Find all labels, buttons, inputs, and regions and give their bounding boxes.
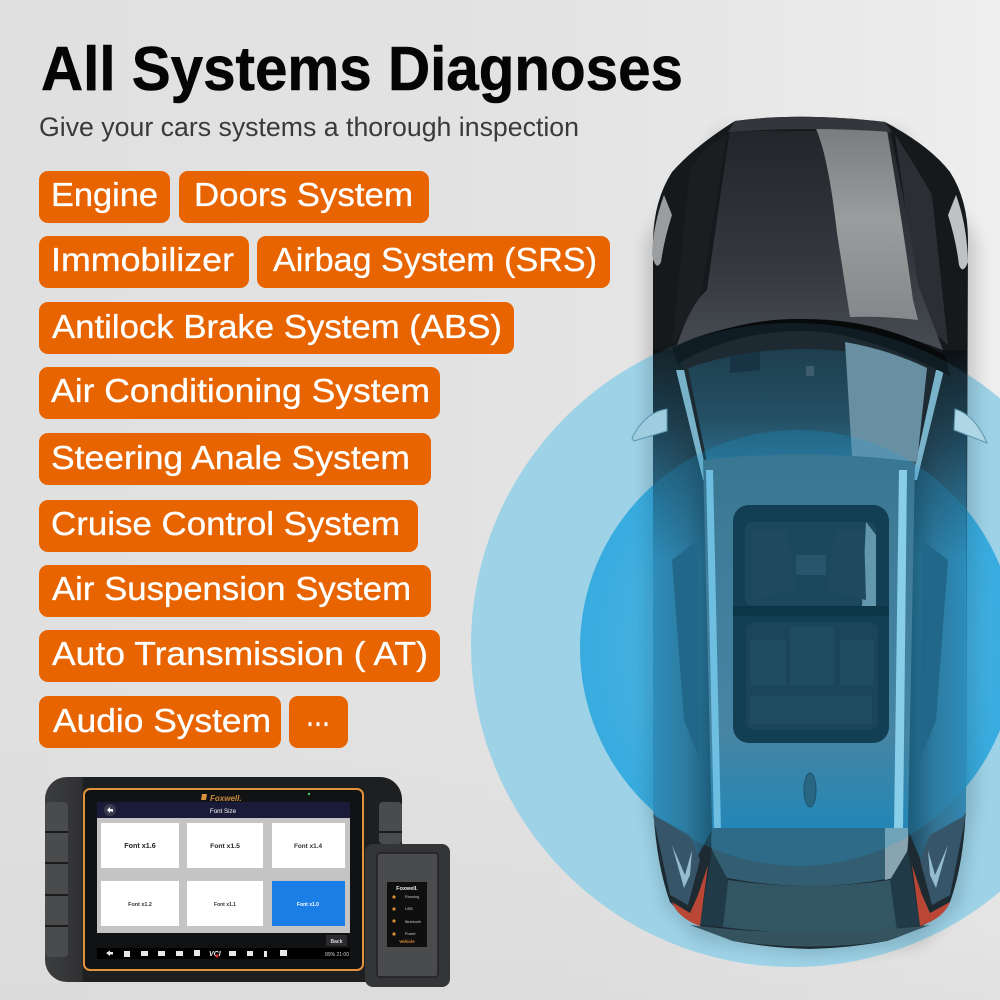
hood highlight bbox=[812, 120, 918, 320]
tile x1.5 bbox=[187, 823, 263, 868]
tag: Airbag System (SRS): Airbag System (SRS) bbox=[273, 241, 597, 278]
bottom toolbar: 89% 21:00 bbox=[325, 952, 349, 958]
tail light right bbox=[912, 865, 950, 926]
bezel bbox=[84, 789, 363, 970]
tile x1.2 bbox=[101, 881, 179, 926]
hood bbox=[677, 131, 943, 350]
adapter indicators: Running bbox=[405, 895, 419, 899]
tile x1.5: Font x1.5 bbox=[210, 843, 240, 850]
rear seats bbox=[750, 626, 874, 724]
tail light left bbox=[672, 865, 708, 926]
tag: Air Suspension System bbox=[39, 565, 431, 617]
tablet body bbox=[45, 777, 402, 982]
right quarter chrome bbox=[928, 845, 948, 888]
grip ribs bbox=[45, 832, 402, 926]
device: scan tablet bbox=[45, 777, 402, 982]
headlight left bbox=[652, 195, 672, 266]
tag: Airbag System (SRS) bbox=[257, 236, 610, 288]
status light bbox=[308, 793, 310, 795]
front sunroof glass bbox=[745, 522, 876, 606]
car body bbox=[653, 117, 968, 949]
back button: Back bbox=[331, 939, 343, 945]
tile x1.0 bbox=[272, 881, 345, 926]
tag: Doors System bbox=[179, 171, 429, 223]
adapter inner panel bbox=[377, 853, 438, 977]
tag: more bbox=[289, 696, 348, 748]
adapter vehicle label: Vehicle bbox=[399, 939, 415, 944]
title: All Systems Diagnoses bbox=[41, 35, 683, 104]
screen header bbox=[97, 802, 350, 818]
tile x1.6 bbox=[101, 823, 179, 868]
inner circle tint bbox=[580, 430, 1000, 866]
sunroof divider bbox=[733, 606, 889, 616]
left fender bbox=[672, 135, 727, 345]
sunroof bbox=[733, 505, 889, 743]
tag: Audio System: Audio System bbox=[53, 702, 271, 739]
rear glass bbox=[723, 880, 897, 933]
car shadow bbox=[646, 130, 976, 955]
screen grid bbox=[97, 818, 350, 933]
tag: Engine: Engine bbox=[51, 176, 158, 213]
outer scan circle bbox=[471, 323, 1000, 967]
glass reflection bbox=[862, 522, 876, 606]
tile x1.1: Font x1.1 bbox=[214, 902, 236, 908]
right lower quarter bbox=[920, 815, 966, 905]
roof right rail bbox=[894, 470, 907, 830]
front seats bbox=[752, 530, 866, 600]
outer circle tint bbox=[471, 323, 1000, 967]
bottom toolbar: VCI bbox=[209, 951, 222, 958]
hood top edge bbox=[728, 117, 892, 132]
left rear pillar bbox=[700, 850, 728, 927]
tag: Doors System: Doors System bbox=[194, 176, 413, 213]
roof bbox=[703, 454, 915, 830]
rear sunroof glass bbox=[746, 622, 878, 730]
tile x1.4 bbox=[272, 823, 345, 868]
tag: Air Suspension System: Air Suspension System bbox=[52, 570, 411, 607]
screen title: Font Size bbox=[210, 808, 237, 815]
right window dark bbox=[920, 540, 948, 760]
left A pillar strip bbox=[676, 370, 708, 480]
left door shading bbox=[653, 350, 708, 560]
tag: Steering Anale System: Steering Anale System bbox=[51, 439, 410, 476]
adapter body bbox=[365, 844, 450, 987]
spoiler bbox=[711, 828, 908, 886]
adapter indicator icons bbox=[392, 895, 396, 936]
tag: Auto Transmission ( AT) bbox=[39, 630, 440, 682]
rear bumper bbox=[690, 925, 930, 946]
left grip bbox=[45, 802, 68, 957]
windshield highlight bbox=[845, 342, 927, 462]
left quarter chrome bbox=[672, 845, 692, 888]
tag: Immobilizer: Immobilizer bbox=[51, 241, 234, 278]
tag: Antilock Brake System (ABS): Antilock Brake System (ABS) bbox=[52, 308, 502, 345]
tag: Air Conditioning System bbox=[39, 367, 440, 419]
left lower quarter bbox=[653, 815, 700, 905]
windshield bbox=[688, 349, 927, 462]
left door panel bbox=[653, 350, 712, 880]
tile x1.1 bbox=[187, 881, 263, 926]
tile x1.4: Font x1.4 bbox=[294, 843, 322, 850]
adapter indicators: Bluetooth bbox=[405, 920, 421, 924]
right rear pillar bbox=[890, 850, 920, 930]
tag: Engine bbox=[39, 171, 170, 223]
right door panel bbox=[908, 350, 967, 880]
inner scan circle bbox=[580, 430, 1000, 866]
rearview mirror bbox=[806, 366, 814, 376]
spoiler highlight bbox=[885, 828, 908, 880]
tile x1.2: Font x1.2 bbox=[128, 902, 152, 908]
back button bbox=[326, 935, 347, 946]
tile x1.6: Font x1.6 bbox=[124, 841, 156, 850]
mirror left bbox=[632, 409, 667, 441]
adapter label bbox=[387, 882, 427, 947]
shark fin antenna bbox=[804, 773, 816, 807]
tag: Audio System bbox=[39, 696, 281, 748]
right fender bbox=[895, 135, 948, 345]
subtitle: Give your cars systems a thorough inspection bbox=[39, 112, 579, 142]
tag: Immobilizer bbox=[39, 236, 249, 288]
tag: Auto Transmission ( AT): Auto Transmission ( AT) bbox=[52, 635, 428, 672]
mirror right bbox=[954, 409, 987, 443]
adapter indicators bbox=[405, 895, 421, 936]
brand logo: Foxwell. bbox=[210, 794, 242, 803]
dash camera bbox=[730, 352, 760, 373]
right door shading bbox=[912, 350, 967, 560]
adapter logo: Foxwell. bbox=[396, 886, 418, 892]
tag: more: ... bbox=[306, 696, 330, 733]
right grip bbox=[379, 802, 402, 844]
panel: system list bbox=[39, 171, 610, 748]
headlight right bbox=[948, 195, 968, 269]
adapter indicators: Power bbox=[405, 932, 416, 936]
tag: Cruise Control System: Cruise Control System bbox=[51, 505, 400, 542]
bottom toolbar bbox=[97, 948, 350, 959]
adapter indicators: USB bbox=[405, 907, 413, 911]
car top view bbox=[632, 117, 987, 955]
roof left rail bbox=[706, 470, 721, 830]
wiper area bbox=[672, 319, 950, 376]
tile x1.0: Font x1.0 bbox=[297, 902, 319, 908]
back icon bbox=[104, 804, 116, 816]
device: VCI adapter bbox=[365, 844, 450, 987]
tag: Steering Anale System bbox=[39, 433, 431, 485]
left window dark bbox=[672, 540, 700, 760]
tag: Cruise Control System bbox=[39, 500, 418, 552]
tag: Antilock Brake System (ABS) bbox=[39, 302, 514, 354]
right A pillar strip bbox=[912, 370, 944, 480]
tag: Air Conditioning System: Air Conditioning System bbox=[51, 372, 430, 409]
